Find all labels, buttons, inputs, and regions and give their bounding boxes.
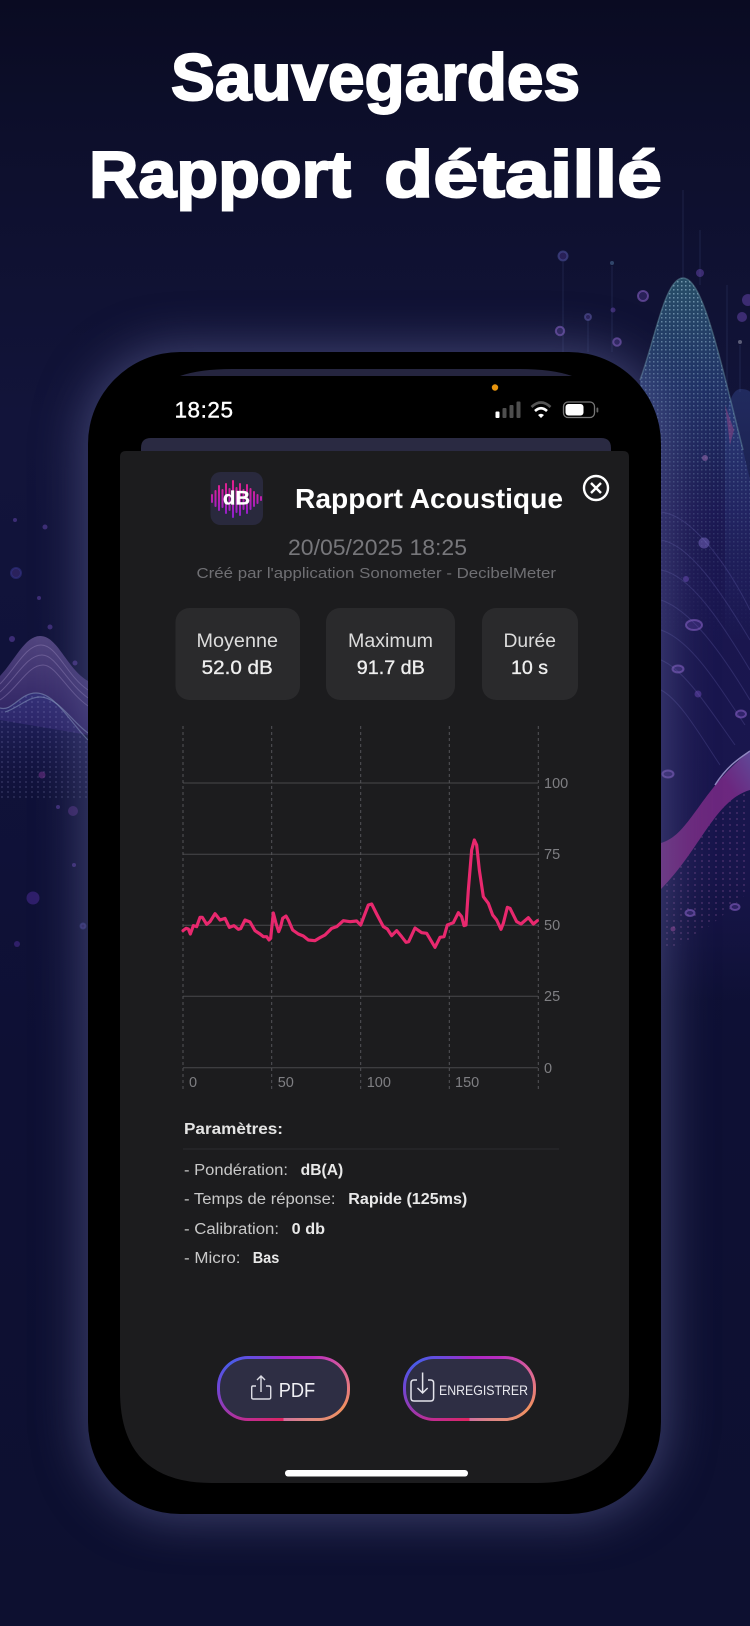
stat card: durée: Durée bbox=[504, 631, 556, 652]
title bbox=[89, 40, 662, 211]
stat card: maximum: Maximum bbox=[348, 631, 433, 652]
title: Sauvegardes bbox=[171, 40, 580, 114]
right haze bbox=[640, 480, 750, 1000]
parameters: - Pondération: bbox=[184, 1162, 288, 1179]
stat card: durée bbox=[482, 608, 578, 700]
screen top strip bbox=[180, 369, 572, 376]
parameters: Paramètres: bbox=[184, 1121, 283, 1138]
y axis labels: 75 bbox=[544, 847, 560, 863]
stat card: durée: 10 s bbox=[511, 657, 548, 679]
parameters: dB(A) bbox=[301, 1162, 343, 1179]
stat card: maximum bbox=[326, 608, 455, 700]
parameters: - Calibration: bbox=[184, 1221, 279, 1238]
y axis labels: 25 bbox=[544, 989, 560, 1005]
particles bbox=[9, 261, 750, 947]
report credit: Créé par l'application Sonometer - DecibelMeter bbox=[196, 565, 556, 582]
app icon: dB bbox=[223, 488, 250, 510]
x axis labels bbox=[189, 1075, 479, 1091]
parameters: Bas bbox=[253, 1250, 279, 1267]
x axis labels: 0 bbox=[189, 1075, 197, 1091]
icon: share bbox=[252, 1376, 271, 1399]
title: détaillé bbox=[384, 137, 662, 211]
close icon bbox=[584, 476, 608, 500]
parameters bbox=[183, 1121, 559, 1267]
stat card: moyenne bbox=[176, 608, 300, 700]
background: waves and particles bbox=[0, 190, 750, 948]
x axis labels: 50 bbox=[278, 1075, 294, 1091]
title: Rapport bbox=[89, 137, 351, 211]
app icon bbox=[210, 472, 263, 525]
y axis labels bbox=[544, 776, 568, 1077]
parameters: - Temps de réponse: bbox=[184, 1191, 336, 1208]
parameters: Rapide (125ms) bbox=[348, 1191, 467, 1208]
y axis labels: 0 bbox=[544, 1061, 552, 1077]
battery icon bbox=[564, 402, 598, 418]
decibel line bbox=[183, 840, 537, 947]
back card bbox=[141, 438, 611, 453]
parameters: - Micro: bbox=[184, 1250, 240, 1267]
report date: 20/05/2025 18:25 bbox=[288, 535, 467, 560]
button: PDF: PDF bbox=[279, 1380, 315, 1402]
stat card: moyenne: Moyenne bbox=[196, 631, 278, 652]
stat card: moyenne: 52.0 dB bbox=[202, 657, 273, 679]
left waves bbox=[0, 636, 88, 800]
report title: Rapport Acoustique bbox=[295, 483, 563, 514]
wifi icon bbox=[532, 402, 550, 418]
status bar bbox=[174, 384, 598, 422]
button: enregistrer bbox=[403, 1356, 536, 1421]
y axis labels: 100 bbox=[544, 776, 568, 792]
button: PDF bbox=[217, 1356, 350, 1421]
home indicator bbox=[285, 1470, 468, 1476]
x axis labels: 100 bbox=[367, 1075, 391, 1091]
status time: 18:25 bbox=[174, 398, 233, 422]
signal icon bbox=[496, 402, 520, 418]
stat card: maximum: 91.7 dB bbox=[357, 657, 425, 679]
phone frame bbox=[88, 352, 661, 1514]
report sheet bbox=[120, 451, 629, 1483]
line chart bbox=[183, 726, 568, 1091]
icon: download bbox=[411, 1372, 433, 1401]
privacy dot bbox=[492, 384, 498, 391]
right waves bbox=[640, 278, 750, 950]
x axis labels: 150 bbox=[455, 1075, 479, 1091]
parameters: 0 db bbox=[292, 1221, 325, 1238]
y axis labels: 50 bbox=[544, 918, 560, 934]
